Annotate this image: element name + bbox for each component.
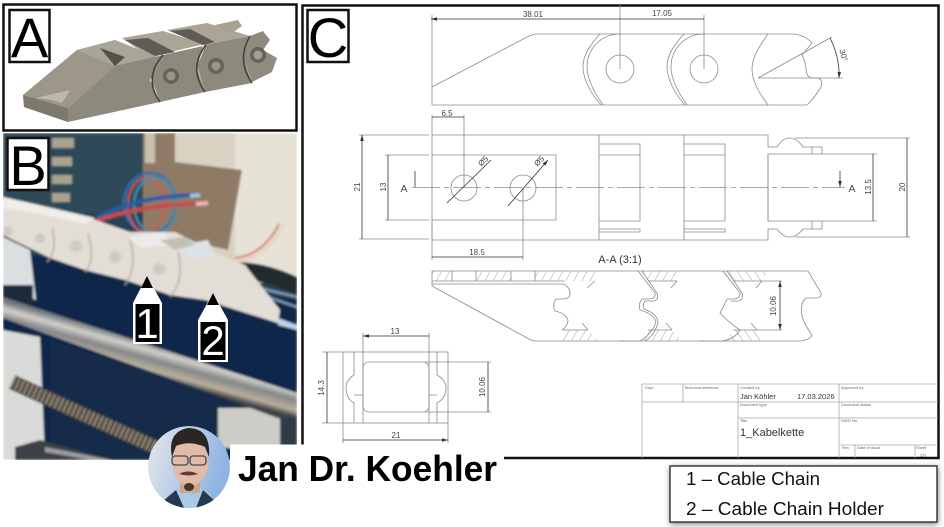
title block: Title [740,418,748,423]
top view drawing [431,5,843,105]
plan view drawing [359,115,910,260]
section heading A-A: A-A (3:1) [598,254,642,266]
end view drawing [322,333,491,443]
end view dimensions [317,327,487,440]
callout 1 [133,276,162,347]
title block: Jan Köhler [740,392,776,401]
title block: Approved by [841,385,863,390]
author name: Jan Dr. Koehler [238,448,497,489]
label A: A [11,6,49,69]
screw [12,382,155,447]
legend box [670,466,938,524]
end view dimensions: 14.3 [317,380,326,396]
title block: 1_Kabelkette [740,427,804,439]
icon: 3D cable chain model [23,20,277,122]
end view dimensions: 21 [392,431,401,440]
plan view dimensions: Ø5 [476,154,491,168]
title block: Dept. [645,385,655,390]
white block [3,237,36,300]
title block: Sheet [916,445,927,450]
label B: B [9,134,47,197]
author portrait [148,426,230,510]
plan view dimensions: 13 [379,182,388,191]
plan view dimensions: 18.5 [469,248,485,257]
grey block [218,408,280,448]
legend box: 2 – Cable Chain Holder [686,499,884,519]
end view dimensions: 10.06 [478,376,487,397]
panel A: 3D model of cable chain [4,4,296,130]
plan view dimensions: 20 [898,182,907,191]
title block: Rev [842,445,849,450]
section view A-A [432,271,821,341]
dimension 38.01: 38.01 [523,10,544,19]
end view dimensions: 13 [391,327,400,336]
plan view dimensions: 21 [353,182,362,191]
callout 1: 1 [135,300,159,347]
callout 2: 2 [201,317,225,364]
title block: Document status [841,402,871,407]
title block [642,384,938,458]
title block: Technical reference [684,385,719,390]
callout 2 [198,293,228,364]
dimension 30 degrees: 30° [838,48,849,62]
title block: DWG No. [841,418,858,423]
dimension 17.05: 17.05 [652,9,673,18]
carriage [3,254,297,442]
rod [3,297,297,425]
name plate background [230,444,504,494]
title block: Document type [740,402,768,407]
plan view dimensions: A [848,183,856,195]
plan view dimensions: A [400,183,408,195]
panel C: technical drawing [302,5,938,458]
plan view dimensions: 13.5 [864,179,873,195]
plan view dimensions: Ø5 [532,154,547,168]
legend box: 1 – Cable Chain [686,469,820,489]
white chain [3,197,280,323]
title block: 17.03.2026 [797,392,835,401]
plan view dimensions [353,109,907,257]
lower rod [15,440,112,460]
title block: Created by [740,385,760,390]
title block: Date of issue [857,445,881,450]
title block: 1/1 [920,453,927,458]
label C: C [308,6,348,69]
wires [124,173,176,233]
panel B: photo of installed cable chain [3,133,297,460]
plan view dimensions: 6.5 [441,109,453,118]
section dimension 10.06: 10.06 [769,295,778,316]
